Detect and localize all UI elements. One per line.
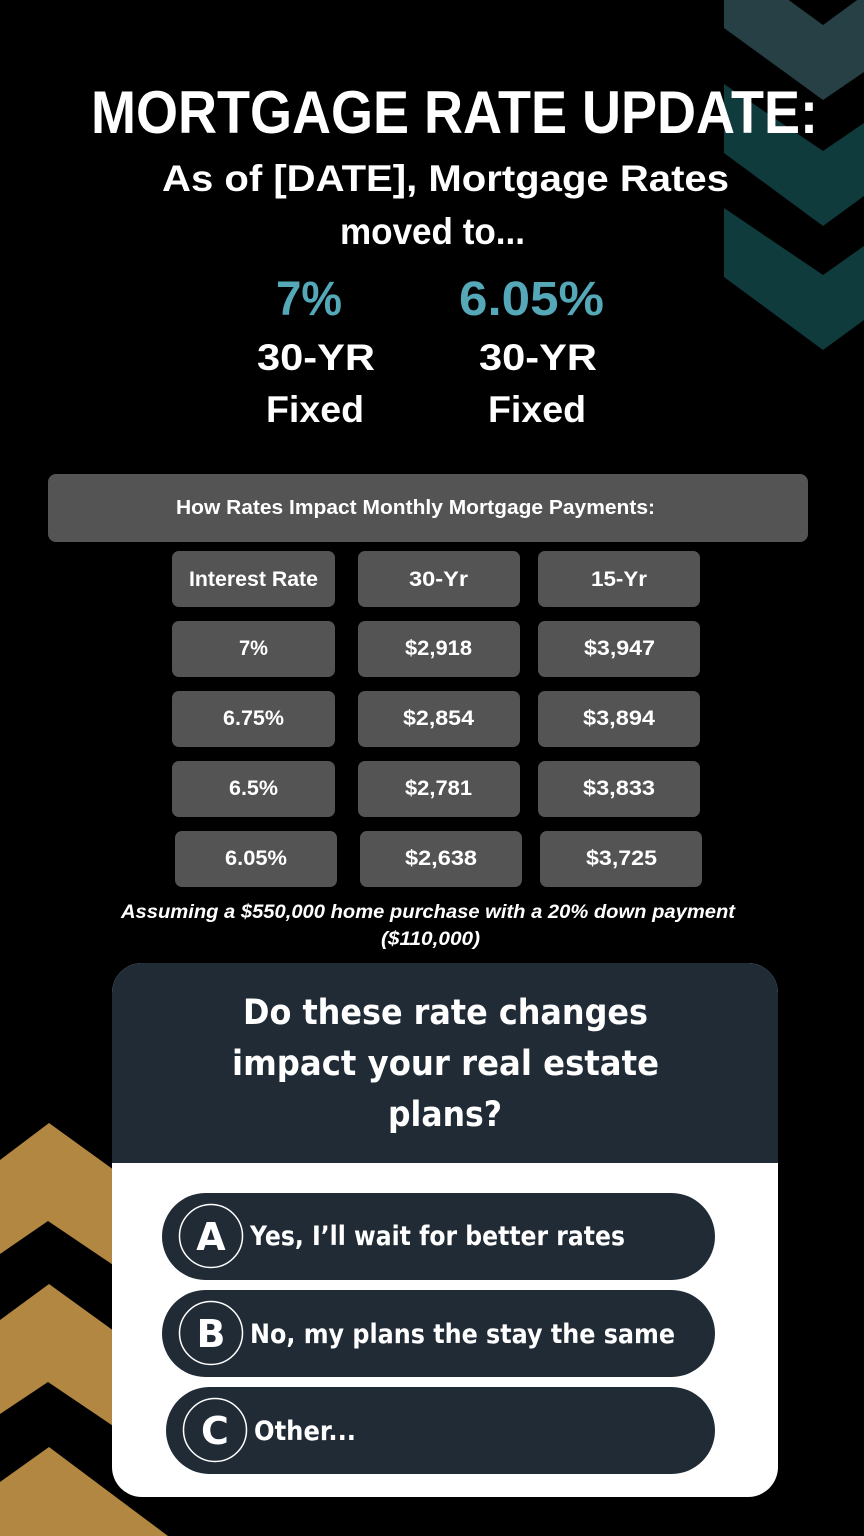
table row 6.75%: [172, 691, 700, 747]
table row 6.05%: $3,725: [586, 847, 657, 870]
rate: 7% 30-YR fixed: Fixed: [266, 389, 364, 430]
table row 6.75%: $2,854: [403, 707, 474, 730]
table row 6.5%: 6.5%: [229, 777, 278, 800]
rate: 6.05% 30-YR fixed: [459, 273, 604, 430]
table row 6.5%: [172, 761, 700, 817]
table row 6.5%: $2,781: [405, 777, 472, 800]
poll question: Do these rate changes: [243, 993, 648, 1033]
table row 7%: 7%: [239, 637, 268, 660]
footnote: ($110,000): [381, 929, 480, 950]
table heading banner: [48, 474, 808, 542]
option A: A: [196, 1215, 226, 1259]
option B: No, my plans the stay the same: [250, 1319, 675, 1350]
rate: 7% 30-YR fixed: [257, 273, 375, 430]
payment table: [172, 551, 702, 887]
subtitle: [162, 158, 729, 252]
subtitle: moved to...: [340, 211, 525, 252]
table row 6.5%: $3,833: [583, 777, 655, 800]
option A: Yes, I’ll wait for better rates: [249, 1221, 625, 1252]
table row 6.75%: $3,894: [583, 707, 655, 730]
table header row: 15-Yr: [591, 568, 647, 591]
table row 6.05%: [175, 831, 702, 887]
table header row: Interest Rate: [189, 568, 318, 591]
footnote: [120, 902, 736, 950]
table row 6.05%: 6.05%: [225, 847, 287, 870]
rate: 6.05% 30-YR fixed: 30-YR: [479, 337, 597, 378]
table row 7%: $3,947: [584, 637, 655, 660]
table row 6.05%: $2,638: [405, 847, 477, 870]
panel: poll card: [112, 963, 778, 1497]
table heading banner: How Rates Impact Monthly Mortgage Payments:: [176, 497, 655, 519]
rate: 7% 30-YR fixed: 30-YR: [257, 337, 375, 378]
icon: gold chevrons bottom left: [0, 1123, 168, 1536]
poll question: [232, 993, 659, 1135]
rate: 6.05% 30-YR fixed: 6.05%: [459, 273, 604, 326]
rate: 6.05% 30-YR fixed: Fixed: [488, 389, 586, 430]
option B: [162, 1290, 715, 1377]
table row 7%: $2,918: [405, 637, 472, 660]
option C: [166, 1387, 715, 1474]
table row 6.75%: 6.75%: [223, 707, 284, 730]
subtitle: As of [DATE], Mortgage Rates: [162, 158, 729, 199]
rate: 7% 30-YR fixed: 7%: [276, 273, 342, 326]
footnote: Assuming a $550,000 home purchase with a 20% down payment: [120, 902, 736, 923]
table header row: [172, 551, 700, 607]
option C: Other...: [254, 1416, 356, 1447]
table header row: 30-Yr: [409, 568, 468, 591]
poll question: impact your real estate: [232, 1044, 659, 1084]
option A: [162, 1193, 715, 1280]
icon: teal chevrons top right: [724, 0, 864, 350]
option C: C: [201, 1409, 229, 1453]
table row 7%: [172, 621, 700, 677]
poll question: plans?: [388, 1095, 502, 1135]
option B: B: [197, 1312, 225, 1356]
